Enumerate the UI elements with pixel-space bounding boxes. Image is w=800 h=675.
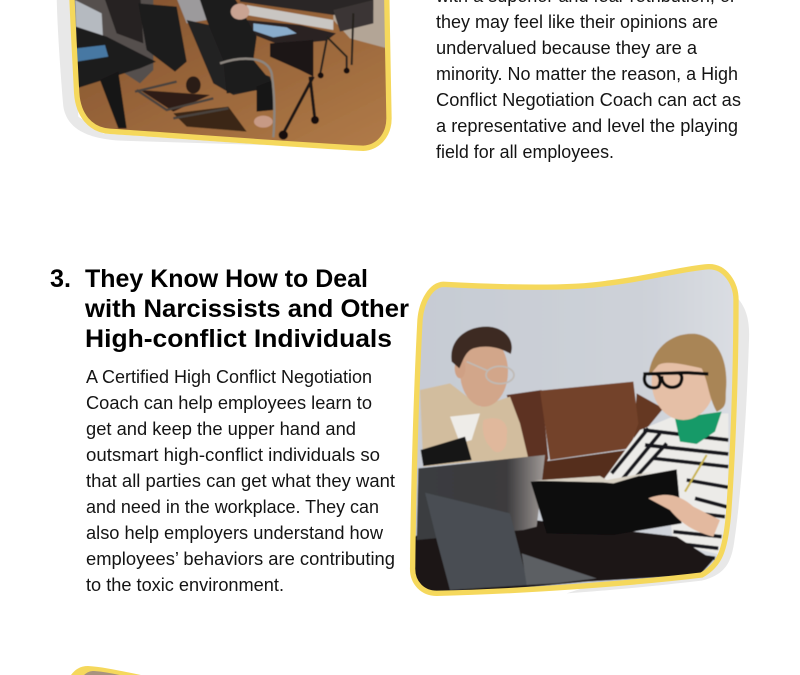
photo border bbox=[72, 0, 389, 148]
heading: point 3: High-conflict Individuals bbox=[85, 325, 392, 353]
heading: point 3: They Know How to Deal bbox=[85, 265, 368, 293]
sofa bbox=[506, 390, 549, 462]
text block: point 3 body: and need in the workplace. They can bbox=[86, 497, 379, 517]
text block: point 2 continuation: minority. No matter the reason, a High bbox=[436, 64, 738, 84]
photo shadow bbox=[567, 293, 749, 593]
text block: point 2 continuation: undervalued because they are a bbox=[436, 38, 698, 58]
back laptop bbox=[417, 455, 545, 540]
woman bbox=[603, 413, 728, 557]
hand bbox=[648, 495, 720, 537]
text block: point 3 body: to the toxic environment. bbox=[86, 575, 284, 595]
photo: next section image top edge bbox=[68, 666, 146, 675]
photo border bbox=[413, 267, 736, 593]
text block: point 2 continuation bbox=[435, 0, 741, 162]
text block: point 2 continuation: field for all employees. bbox=[436, 142, 614, 162]
text block: point 3 body: that all parties can get what they want bbox=[86, 471, 395, 491]
heading: point 3: with Narcissists and Other bbox=[84, 295, 409, 323]
photo scene bbox=[67, 0, 393, 150]
back wall and dark table bbox=[332, 0, 385, 48]
front laptop bbox=[425, 493, 528, 590]
man bbox=[420, 383, 528, 467]
text block: point 3 body: also help employers understand how bbox=[86, 523, 384, 543]
heading: point 3: 3. bbox=[50, 265, 71, 293]
heading: point 3 bbox=[50, 265, 409, 353]
text block: point 3 body: Coach can help employees learn to bbox=[86, 393, 372, 413]
text block: point 3 body: employees’ behaviors are contributing bbox=[86, 549, 395, 569]
text block: point 3 body: A Certified High Conflict Negotiation bbox=[86, 367, 372, 387]
text block: point 3 body: outsmart high-conflict individuals so bbox=[86, 445, 380, 465]
photo: office meeting with chairs and tables bbox=[57, 0, 393, 152]
photo scene bbox=[415, 269, 734, 591]
left side floor shadow and bottles bbox=[73, 0, 153, 83]
text block: point 2 continuation: a representative and level the playing bbox=[436, 116, 738, 136]
notebook bbox=[531, 469, 682, 535]
table bbox=[410, 520, 713, 597]
text block: point 2 continuation: they may feel like their opinions are bbox=[436, 12, 718, 32]
photo: two colleagues talking with notebook and laptops bbox=[407, 260, 749, 600]
text block: point 3 body bbox=[86, 367, 395, 595]
text block: point 2 continuation: Conflict Negotiation Coach can act as bbox=[436, 90, 741, 110]
chairs bbox=[138, 3, 187, 72]
photo shadow bbox=[57, 0, 360, 152]
text block: point 3 body: get and keep the upper hand and bbox=[86, 419, 356, 439]
